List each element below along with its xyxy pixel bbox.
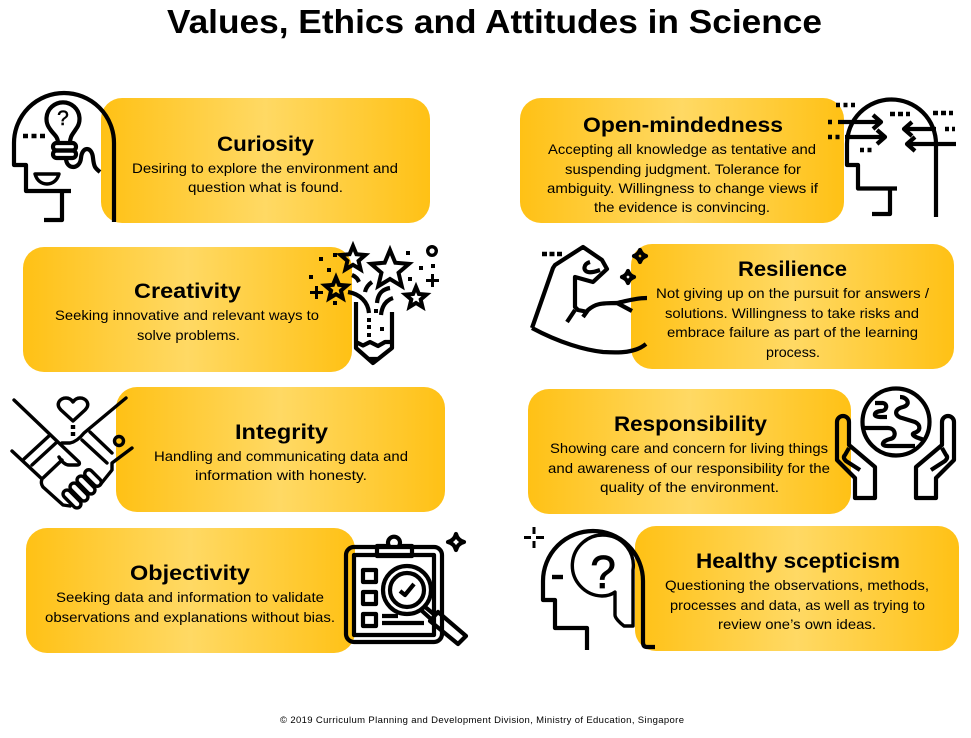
panel: open-mindedness: [520, 98, 956, 223]
text: resilience description: embrace failure as part of the learning: [667, 325, 918, 340]
panel: healthy scepticism: [524, 526, 959, 651]
text: curiosity description: [132, 161, 398, 195]
heading: creativity: Creativity: [134, 279, 241, 303]
icon: flexed arm: [532, 247, 647, 352]
icon: open head with arrows: [828, 100, 956, 217]
text: responsibility description: Showing care and concern for living things: [550, 441, 828, 456]
text: creativity description: solve problems.: [137, 328, 240, 343]
heading: curiosity: Curiosity: [217, 132, 314, 156]
panel: creativity: [23, 246, 439, 372]
icon: clipboard with magnifier: [346, 534, 466, 644]
text: responsibility description: quality of the environment.: [600, 480, 779, 495]
title: Values, Ethics and Attitudes in Science: [167, 3, 822, 40]
heading: responsibility: Responsibility: [614, 412, 767, 436]
text: creativity description: Seeking innovative and relevant ways to: [55, 308, 319, 323]
text: open-mindedness description: [547, 142, 818, 215]
heading: integrity: Integrity: [235, 420, 328, 444]
text: resilience description: process.: [766, 345, 820, 360]
text: integrity description: [154, 449, 408, 483]
text: resilience description: solutions. Willingness to take risks and: [665, 306, 919, 321]
text: open-mindedness description: ambiguity. Willingness to change views if: [547, 181, 818, 196]
text: healthy scepticism description: Questioning the observations, methods,: [665, 578, 929, 593]
text: integrity description: Handling and communicating data and: [154, 449, 408, 464]
text: responsibility description: [548, 441, 830, 495]
card: responsibility: [528, 389, 851, 514]
text: open-mindedness description: Accepting all knowledge as tentative and: [548, 142, 816, 157]
text: curiosity description: Desiring to explore the environment and: [132, 161, 398, 176]
icon: hands holding globe: [837, 388, 954, 498]
icon: head with light bulb: ?: [57, 107, 69, 130]
panel: integrity: [12, 387, 445, 512]
text: creativity description: [55, 308, 319, 343]
text: curiosity description: question what is found.: [188, 180, 343, 195]
heading: resilience: Resilience: [738, 257, 847, 281]
icon: handshake with heart: [12, 398, 132, 510]
text: healthy scepticism description: processes and data, as well as trying to: [670, 598, 925, 613]
panel: objectivity: [26, 528, 466, 653]
card: objectivity: [26, 528, 355, 653]
card: curiosity: [101, 98, 430, 223]
card: integrity: [116, 387, 445, 512]
text: open-mindedness description: suspending judgment. Tolerance for: [565, 162, 802, 177]
text: responsibility description: and awareness of our responsibility for the: [548, 461, 830, 476]
text: objectivity description: observations and explanations without bias.: [45, 610, 335, 625]
panel: curiosity: [14, 93, 430, 223]
text: objectivity description: [45, 590, 335, 625]
icon: pencil with stars: [309, 246, 439, 363]
card: creativity: [23, 247, 352, 372]
text: open-mindedness description: the evidence is convincing.: [594, 200, 770, 215]
heading: objectivity: Objectivity: [130, 561, 250, 585]
text: healthy scepticism description: [665, 578, 929, 632]
icon: head with light bulb: [14, 93, 114, 222]
icon: head with question mark: ?: [590, 546, 616, 598]
icon: head with question mark: [524, 527, 655, 650]
card: resilience: [631, 244, 954, 369]
card: healthy scepticism: [635, 526, 959, 651]
text: healthy scepticism description: review one’s own ideas.: [718, 617, 876, 632]
card: open-mindedness: [520, 98, 844, 223]
heading: open-mindedness: Open-mindedness: [583, 113, 783, 137]
text: integrity description: information with honesty.: [195, 468, 367, 483]
text: resilience description: [656, 286, 929, 360]
footer credit: © 2019 Curriculum Planning and Development Division, Ministry of Education, Singapore: [280, 715, 684, 726]
panel: responsibility: [528, 388, 954, 514]
text: objectivity description: Seeking data and information to validate: [56, 590, 324, 605]
text: resilience description: Not giving up on the pursuit for answers /: [656, 286, 929, 301]
panel: resilience: [532, 244, 954, 369]
heading: healthy scepticism: Healthy scepticism: [696, 549, 900, 573]
